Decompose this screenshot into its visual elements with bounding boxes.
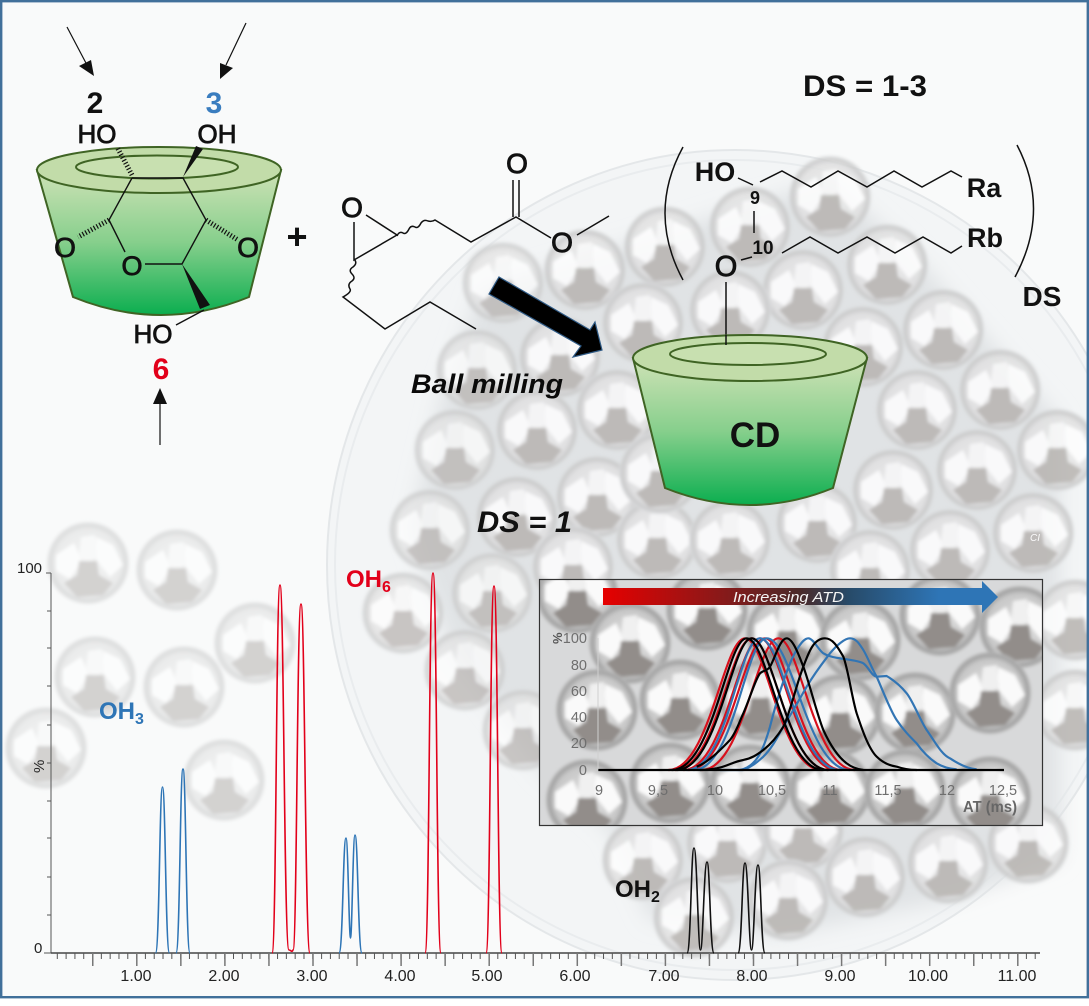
- arrow: increasing ATD: Increasing ATD: [733, 589, 844, 606]
- arrow: position 6: [153, 388, 167, 445]
- arrow: increasing ATD: [603, 581, 998, 613]
- panel: grafted product structure: [665, 145, 1061, 345]
- chart axis labels: 60: [571, 684, 587, 700]
- label: ball milling: Ball milling: [411, 369, 564, 399]
- chart axis labels: 12: [939, 783, 955, 799]
- x axis labels: 11.00: [998, 968, 1037, 985]
- y axis labels: 0: [34, 940, 42, 957]
- chart axis labels: 11: [822, 783, 838, 799]
- peaks: OH2: [687, 848, 765, 953]
- chart axis labels: [550, 631, 1017, 816]
- x axis labels: 6.00: [559, 968, 591, 985]
- x axis labels: 3.00: [296, 968, 328, 985]
- label: site 2: 2: [87, 87, 103, 120]
- x axis labels: [120, 968, 1037, 985]
- peaks: OH3: [156, 769, 362, 953]
- chart axis labels: 10: [707, 783, 723, 799]
- label: OH3: OH: [99, 698, 135, 725]
- y axis labels: 100: [17, 560, 42, 577]
- atom labels: HO: [134, 319, 172, 349]
- chart axis labels: 12,5: [989, 783, 1017, 799]
- panel: grafted product structure: 10: [752, 238, 774, 259]
- label: OH3: 3: [135, 711, 144, 728]
- panel: epoxidised fatty ester molecule: [341, 148, 609, 329]
- x axis labels: 4.00: [384, 968, 416, 985]
- y axis labels: %: [31, 760, 48, 773]
- panel: grafted product structure: Rb: [967, 223, 1003, 253]
- panel: grafted product structure: HO: [695, 157, 735, 187]
- atom labels: [54, 119, 259, 349]
- watermark: CI: [1030, 533, 1040, 544]
- x axis labels: 2.00: [208, 968, 240, 985]
- chart axis labels: 0: [579, 763, 587, 779]
- panel: grafted product structure: O: [715, 251, 737, 283]
- y axis: [44, 573, 51, 953]
- chart axis labels: 10,5: [758, 783, 786, 799]
- panel: grafted product structure: DS: [1023, 281, 1061, 312]
- label: OH2: OH: [615, 876, 651, 903]
- arrow: position 2: [67, 27, 94, 76]
- heading: DS range: DS = 1-3: [803, 70, 927, 103]
- cup: [37, 147, 281, 315]
- plus sign: +: [286, 216, 308, 257]
- panel: epoxidised fatty ester molecule: O: [551, 227, 573, 258]
- chart axis labels: 100: [563, 631, 587, 647]
- label: site 6: 6: [153, 353, 169, 386]
- panel: epoxidised fatty ester molecule: O: [506, 148, 528, 179]
- panel: epoxidised fatty ester molecule: O: [341, 192, 363, 223]
- chart axis labels: 9,5: [648, 783, 668, 799]
- panel: grafted product structure: 9: [750, 188, 760, 208]
- x axis labels: 1.00: [120, 968, 152, 985]
- atom labels: O: [54, 232, 76, 263]
- chart axis labels: 80: [571, 658, 587, 674]
- heading: DS equals one: DS = 1: [477, 506, 572, 539]
- label: site 3: 3: [206, 87, 222, 120]
- x axis: [51, 953, 1040, 960]
- chart axis labels: 40: [571, 710, 587, 726]
- atom labels: OH: [198, 119, 236, 149]
- x axis labels: 10.00: [908, 968, 948, 985]
- y axis labels: [17, 560, 48, 957]
- panel: chromatogram: [17, 560, 1040, 985]
- atom labels: O: [237, 232, 259, 263]
- x axis labels: 5.00: [471, 968, 503, 985]
- ATD curves: [598, 638, 1004, 770]
- chart axis labels: 9: [595, 783, 603, 799]
- x axis labels: 9.00: [824, 968, 856, 985]
- panel: CD cup: CD: [730, 416, 780, 455]
- label: OH2: 2: [651, 889, 660, 906]
- chart axis labels: %: [550, 632, 565, 644]
- chart axis labels: 11,5: [874, 783, 902, 799]
- panel: cyclodextrin cup with hydroxyl sites: [37, 23, 281, 445]
- atom labels: HO: [78, 119, 116, 149]
- label: OH6: OH: [346, 566, 382, 593]
- x axis labels: 7.00: [648, 968, 680, 985]
- label: OH6: 6: [382, 579, 391, 596]
- arrow: position 3: [220, 23, 246, 79]
- x axis labels: 8.00: [736, 968, 768, 985]
- chart axis labels: 20: [571, 736, 587, 752]
- chart axis labels: AT (ms): [963, 799, 1017, 816]
- arrow: ball milling reaction: [489, 277, 602, 357]
- atom labels: O: [121, 251, 143, 281]
- panel: CD cup: [633, 335, 867, 505]
- peaks: OH6: [272, 573, 502, 953]
- panel: grafted product structure: Ra: [967, 173, 1002, 203]
- panel: arrival time distribution inset: [538, 578, 1044, 826]
- glucose ring bonds: [78, 146, 238, 325]
